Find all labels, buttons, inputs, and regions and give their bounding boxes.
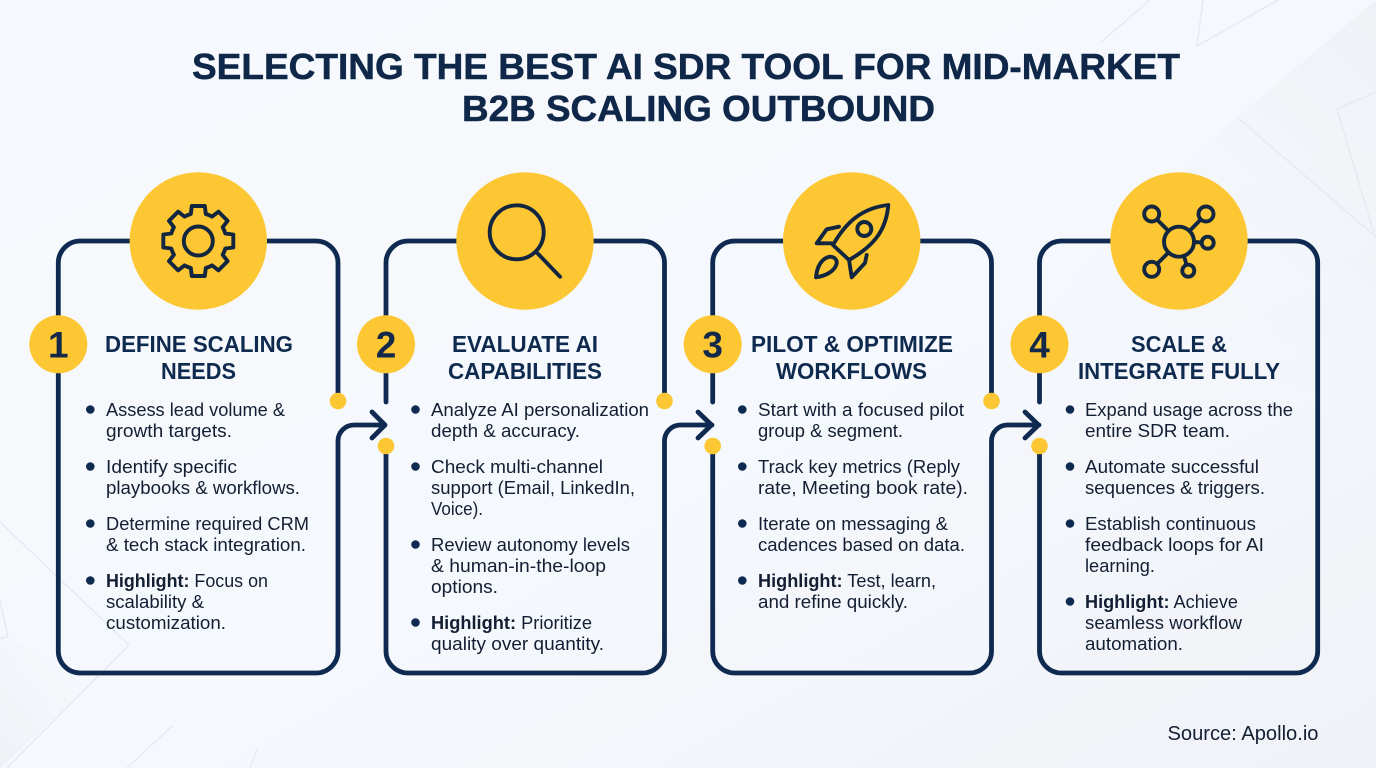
bullet list: playbooks & workflows. (106, 477, 300, 498)
bullet list: depth & accuracy. (431, 420, 580, 441)
number badge 3: 3 (702, 324, 723, 366)
bullet list: rate, Meeting book rate). (758, 477, 968, 498)
bullet list: & human-in-the-loop (431, 555, 606, 576)
source credit: Source: Apollo.io (1168, 723, 1318, 745)
number badge 2 (357, 315, 415, 373)
bullet list: seamless workflow (1085, 612, 1243, 633)
heading: EVALUATE AI (452, 331, 598, 357)
bullet list: Assess lead volume & (106, 399, 286, 420)
number badge 1 (29, 315, 87, 373)
icon: gear (130, 172, 267, 310)
bullet list: automation. (1085, 633, 1183, 654)
title (192, 46, 1180, 129)
panel: step 4 scale and integrate fully (1010, 172, 1318, 673)
heading: WORKFLOWS (776, 358, 927, 384)
bullet list: Highlight: Prioritize (431, 612, 592, 633)
title: B2B SCALING OUTBOUND (462, 88, 935, 129)
panel: step 3 pilot and optimize workflows (684, 172, 1039, 673)
icon: rocket (783, 172, 920, 310)
frame and arrow to step 4 (704, 241, 1039, 673)
heading: DEFINE SCALING (105, 331, 293, 357)
bullet list: Establish continuous (1085, 513, 1256, 534)
bullet list: Expand usage across the (1085, 399, 1293, 420)
heading: PILOT & OPTIMIZE (751, 331, 953, 357)
bullet list: group & segment. (758, 420, 903, 441)
bullet list: Voice). (431, 498, 483, 519)
bullet list: entire SDR team. (1085, 420, 1230, 441)
bullet list: Determine required CRM (106, 513, 309, 534)
icon: magnifying glass (456, 172, 594, 310)
heading: SCALE & (1131, 331, 1227, 357)
bullet list: Track key metrics (Reply (758, 456, 961, 477)
bullet list (738, 399, 968, 612)
bullet list: options. (431, 576, 498, 597)
bullet list: Start with a focused pilot (758, 399, 964, 420)
bullet list (86, 399, 309, 633)
bullet list: Automate successful (1085, 456, 1259, 477)
heading (1078, 331, 1280, 384)
bullet list: Highlight: Focus on (106, 570, 268, 591)
bullet list: sequences & triggers. (1085, 477, 1265, 498)
number badge 2: 2 (376, 324, 396, 366)
bullet list: Highlight: Test, learn, (758, 570, 936, 591)
frame and arrow to step 3 (378, 241, 712, 673)
bullet list: quality over quantity. (431, 633, 604, 654)
bullet list: scalability & (106, 591, 205, 612)
heading: NEEDS (161, 358, 236, 384)
bullet list: cadences based on data. (758, 534, 965, 555)
bullet list: Identify specific (106, 456, 237, 477)
bullet list: Iterate on messaging & (758, 513, 949, 534)
heading (448, 331, 602, 384)
icon: network hub (1110, 172, 1248, 310)
heading (751, 331, 953, 384)
frame and arrow to step 2 (58, 241, 385, 673)
number badge 4: 4 (1029, 324, 1050, 366)
panel: step 1 define scaling needs (29, 172, 385, 673)
bullet list: Check multi-channel (431, 456, 603, 477)
bullet list: Review autonomy levels (431, 534, 630, 555)
bullet list: Analyze AI personalization (431, 399, 649, 420)
bullet list: customization. (106, 612, 226, 633)
number badge 4 (1010, 315, 1068, 373)
bullet list: and refine quickly. (758, 591, 908, 612)
number badge 1: 1 (48, 324, 69, 366)
bullet list (411, 399, 649, 654)
number badge 3 (684, 315, 742, 373)
heading (105, 331, 293, 384)
heading: CAPABILITIES (448, 358, 602, 384)
panel: step 2 evaluate AI capabilities (357, 172, 712, 673)
title: SELECTING THE BEST AI SDR TOOL FOR MID-MARKET (192, 46, 1180, 87)
heading: INTEGRATE FULLY (1078, 358, 1280, 384)
bullet list (1066, 399, 1293, 654)
bullet list: learning. (1085, 555, 1155, 576)
bullet list: growth targets. (106, 420, 232, 441)
bullet list: support (Email, LinkedIn, (431, 477, 635, 498)
frame (1031, 241, 1318, 673)
bullet list: & tech stack integration. (106, 534, 306, 555)
bullet list: Highlight: Achieve (1085, 591, 1238, 612)
bullet list: feedback loops for AI (1085, 534, 1264, 555)
